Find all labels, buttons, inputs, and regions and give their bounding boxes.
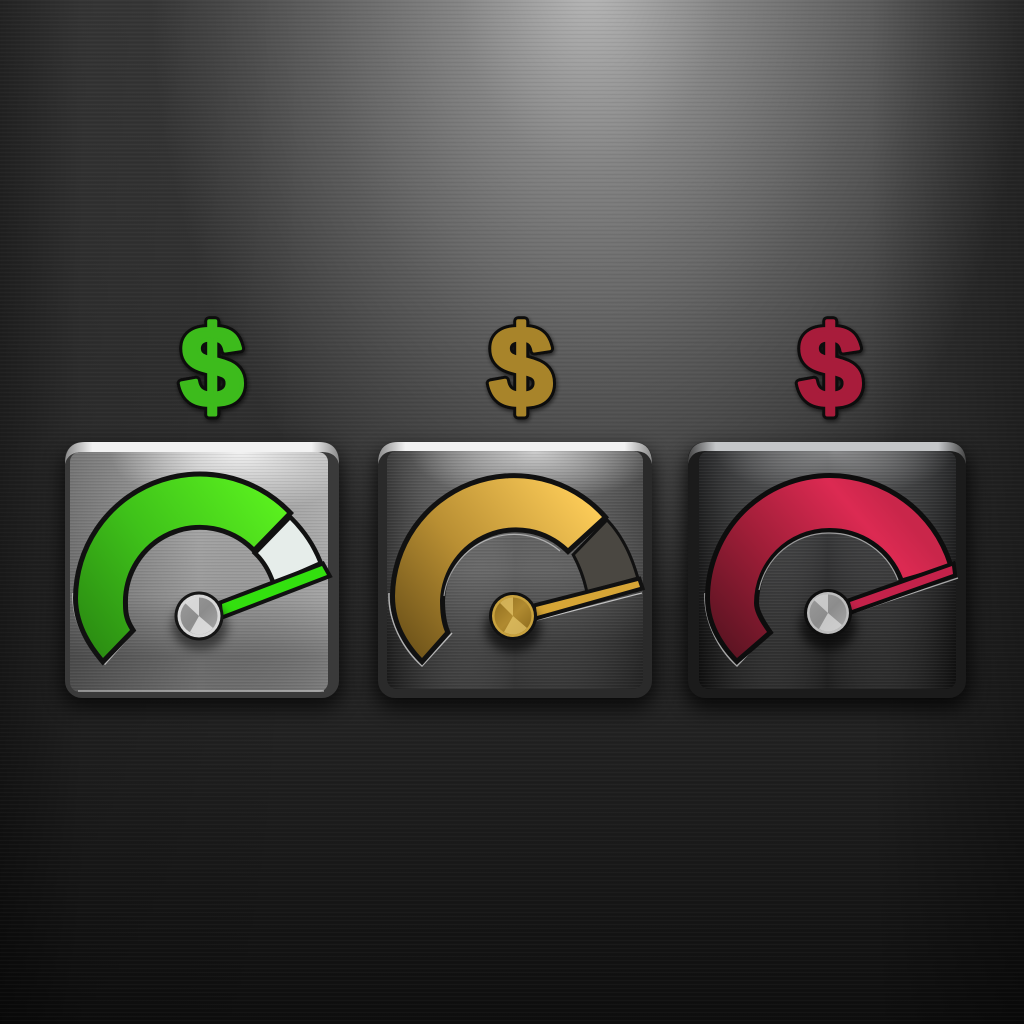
icon: red dollar sign: $ (798, 304, 862, 431)
green gauge group (62, 304, 342, 708)
gauge arc: red full zone (705, 478, 948, 666)
gauge arc: gold zone (389, 478, 636, 666)
hub: silver knob (172, 592, 228, 650)
needle: red (850, 566, 958, 613)
gold gauge group (375, 304, 655, 708)
icon: red dollar sign: $ (798, 304, 862, 431)
panel: mid-grey plate (375, 442, 655, 708)
icon: green dollar sign: $ (180, 304, 244, 431)
needle: gold (536, 581, 642, 620)
gauge arc: green zone (73, 477, 318, 664)
needle: green (222, 566, 327, 618)
red gauge group (685, 304, 969, 708)
icon: green dollar sign: $ (180, 304, 244, 431)
panel: light silver plate (62, 442, 342, 708)
icon: gold dollar sign: $ (489, 304, 553, 431)
panel: dark plate (685, 442, 969, 708)
hub: steel knob (800, 589, 856, 650)
icon: gold dollar sign: $ (489, 304, 553, 431)
hub: brass knob (485, 592, 541, 652)
